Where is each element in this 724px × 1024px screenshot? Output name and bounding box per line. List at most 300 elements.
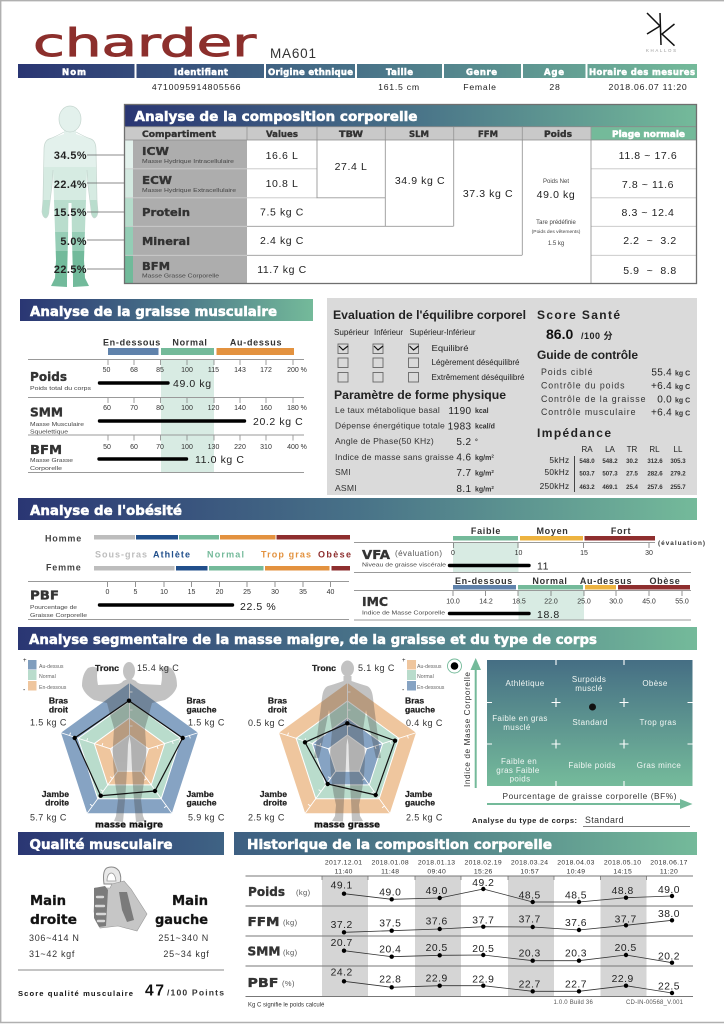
panel: muscle fat analysis: Au-dessus [230, 338, 282, 348]
logo: Khallos: KHALLOS [646, 48, 676, 53]
IMC chart: 25.0 [577, 598, 591, 606]
line chart: SMM: 20.7 [331, 938, 353, 949]
panel: muscle fat analysis: Normal [172, 338, 208, 348]
radar labels: lean mass: masse maigre [95, 820, 163, 830]
left hand: gauche [155, 913, 208, 928]
dates: 15:26 [474, 868, 493, 876]
physical parameters: Indice de masse sans graisse [335, 452, 454, 462]
legend: lean mass: - [23, 687, 26, 694]
panel: composition table: Poids [544, 130, 572, 140]
panel: muscle fat analysis: 220 [234, 444, 246, 451]
panel: muscle fat analysis: 70 [156, 444, 164, 451]
impedance table: 250kHz [540, 481, 570, 491]
footnotes: Kg C signifie le poids calculé [248, 1002, 325, 1008]
dates: 09:40 [427, 868, 446, 876]
radar labels: lean mass: Bras [186, 696, 206, 706]
control guide: kg C [675, 410, 690, 418]
panel: obesity analysis [18, 498, 705, 621]
right hand: Main [30, 894, 66, 909]
body composition figure: 15.5% [54, 207, 87, 219]
radar labels: lean mass: Tronc [95, 663, 119, 673]
row values: 11.8 ~ 17.6 [619, 150, 677, 162]
row: BFM: BFM [30, 442, 62, 457]
impedance table: 50kHz [544, 467, 570, 477]
PBF gender scale: Femme [46, 562, 82, 572]
physical parameters: kg/m [475, 486, 491, 494]
row values: 37.3 kg C [463, 188, 513, 200]
heading: history: Historique de la composition corporelle [247, 838, 552, 853]
radar labels: lean mass [30, 663, 225, 830]
VFA chart [354, 526, 705, 572]
label: horizontal axis: Pourcentage de graisse corporelle (BF%) [502, 791, 677, 801]
line chart: SMM: 20.4 [379, 945, 401, 956]
line chart: FFM: 37.5 [379, 919, 401, 930]
patient values: 28 [549, 82, 561, 92]
body type matrix: musclé [575, 684, 603, 693]
PBF chart: 35 [299, 589, 307, 596]
IMC chart: 22.0 [544, 598, 558, 606]
PBF gender scale [45, 534, 351, 572]
line chart: FFM: 37.2 [331, 920, 353, 931]
panel: muscle fat analysis: 50 [103, 444, 111, 451]
body type matrix: gras Faible [496, 766, 540, 775]
patient header bar [18, 64, 697, 78]
PBF chart: 30 [271, 589, 279, 596]
row labels: SMM [248, 944, 280, 958]
row: Poids [30, 369, 212, 392]
row labels: (%) [282, 979, 295, 988]
IMC chart: 55.0 [675, 598, 689, 606]
left hand: 251~340 N [158, 933, 209, 943]
dates: 10:49 [567, 868, 585, 876]
radar labels: lean mass: Jambe [42, 789, 69, 799]
panel: muscle fat analysis: 115 [208, 367, 219, 374]
legend: lean mass [23, 658, 67, 694]
dates [325, 860, 688, 876]
VFA chart: Fort [611, 526, 631, 536]
radar labels: fat mass: Bras [405, 696, 424, 706]
VFA chart: 0 [451, 550, 455, 557]
data polygon: lean mass [72, 698, 185, 798]
line chart: Poids: 49.0 [379, 888, 401, 899]
PBF chart: Graisse Corporelle [30, 613, 87, 619]
radar labels: lean mass: gauche [186, 798, 217, 808]
radar labels: lean mass: gauche [186, 704, 217, 714]
row values: 27.4 L [335, 161, 367, 173]
radar labels: fat mass: 0.5 kg C [248, 718, 285, 728]
heading: obesity: Analyse de l'obésité [30, 504, 182, 519]
VFA chart: 15 [580, 550, 588, 557]
body composition figure: 22.5% [54, 264, 87, 276]
body type result: Standard [585, 815, 624, 825]
panel: composition table [124, 104, 696, 284]
impedance table: 255.7 [670, 484, 686, 491]
body type matrix: Faible en [501, 757, 537, 766]
legend: fat mass: - [402, 687, 405, 694]
row labels: ECW [142, 174, 172, 187]
IMC chart: IMC [362, 594, 388, 609]
line chart: Poids: 49.0 [426, 886, 448, 897]
health score: /100 分 [581, 330, 613, 341]
physical parameters: Dépense énergétique totale [335, 420, 445, 430]
body type matrix [487, 660, 692, 786]
body type matrix: Trop gras [639, 718, 677, 727]
row labels [248, 884, 311, 990]
radar labels: lean mass: 15.4 kg C [137, 663, 179, 673]
physical parameters: 2 [491, 485, 494, 490]
physical parameters: ° [475, 438, 478, 446]
panel: muscle fat analysis: En-dessous [103, 338, 161, 348]
PBF gender scale: Normal [207, 550, 244, 560]
line chart: PBF: 22.9 [612, 974, 634, 985]
radar labels: lean mass: droit [49, 704, 68, 714]
line chart: SMM: 20.5 [426, 943, 448, 954]
row labels: Masse Hydrique Extracellulaire [142, 188, 236, 194]
radar labels: lean mass: Jambe [186, 789, 214, 799]
panel: muscle fat analysis: 80 [156, 405, 164, 412]
row: SMM: Masse Musculaire [30, 422, 84, 428]
IMC chart: Au-dessus [580, 576, 632, 586]
physical parameters: 5.2 [456, 437, 472, 448]
row values: 2.4 kg C [260, 235, 304, 247]
legend: lean mass: Au-dessus [39, 664, 64, 670]
health score: Score Santé [537, 308, 620, 322]
impedance table: 282.6 [647, 470, 663, 478]
body composition figure: 34.5% [54, 150, 87, 162]
IMC chart: 10.0 [446, 598, 460, 606]
row values: 7.8 ~ 11.6 [622, 179, 674, 191]
row: BFM [30, 442, 245, 472]
dates: 2018.03.24 [511, 860, 548, 866]
row labels: (kg) [283, 948, 298, 957]
radar labels: fat mass: droite [263, 798, 287, 808]
impedance table: 30.2 [626, 458, 639, 465]
physical parameters [334, 388, 506, 495]
impedance table: 279.2 [670, 470, 686, 478]
panel: segmental analysis [18, 627, 697, 830]
radar labels: lean mass: droite [45, 798, 69, 808]
row values: 8.3 ~ 12.4 [622, 207, 674, 219]
row labels: PBF [248, 975, 278, 990]
panel: composition history [234, 832, 697, 1008]
legend: fat mass: + [402, 658, 406, 664]
icon: target marker [448, 659, 462, 673]
arrow: horizontal axis [487, 799, 692, 809]
radar labels: fat mass: 2.5 kg C [248, 812, 285, 822]
patient values: 161.5 cm [378, 82, 420, 92]
impedance table: RL [649, 445, 660, 454]
panel: muscle fat analysis: 130 [208, 444, 219, 451]
PBF chart: 0 [106, 589, 110, 596]
dates: 11:20 [660, 868, 678, 876]
line chart: Poids [331, 878, 680, 904]
panel: muscle fat analysis: 200 % [287, 367, 307, 374]
right hand: droite [30, 913, 77, 928]
panel: muscle fat analysis: 85 [156, 367, 164, 374]
row: BFM: Corporelle [30, 466, 62, 472]
panel: muscle fat analysis: 140 [234, 405, 246, 412]
logo: Khallos [646, 13, 676, 53]
body type matrix: poids [510, 774, 530, 784]
body composition figure: 22.4% [54, 179, 87, 191]
physical parameters: Le taux métabolique basal [335, 405, 440, 415]
control guide: Contrôle de la graisse [541, 394, 646, 404]
physical parameters: kcal [475, 408, 489, 415]
panel: muscle fat analysis: 400 % [287, 444, 307, 451]
radar labels: fat mass: gauche [405, 798, 435, 808]
muscle quality score: Score qualité musculaire [18, 989, 133, 998]
body type matrix: Faible poids [568, 761, 616, 770]
line chart: SMM [331, 938, 680, 965]
right hand: 31~42 kgf [29, 949, 75, 959]
control guide: kg C [675, 370, 690, 378]
physical parameters: 1983 [448, 422, 472, 432]
control guide: 55.4 [651, 368, 672, 378]
physical parameters: 1190 [448, 406, 472, 417]
panel: composition table: Values [266, 130, 298, 140]
legend: fat mass: Normal [417, 674, 434, 680]
VFA chart: (évaluation) [395, 549, 442, 558]
marker: standard [589, 704, 596, 710]
health score [537, 308, 620, 342]
body composition figure: 5.0% [60, 236, 87, 248]
control guide: +6.4 [651, 408, 672, 418]
dates: 10:57 [520, 868, 539, 876]
VFA chart: 11 [537, 560, 549, 572]
PBF gender scale: Athlète [153, 550, 190, 560]
impedance table: 463.2 [579, 484, 595, 491]
VFA chart: VFA [362, 547, 390, 562]
patient header bar: Genre [466, 68, 497, 78]
data polygon: fat mass [303, 721, 397, 797]
physical parameters: 2 [491, 469, 494, 474]
row values: 16.6 L [266, 150, 298, 162]
VFA chart: Niveau de graisse viscérale [362, 562, 446, 568]
balance evaluation: Extrêmement déséquilibré [432, 373, 524, 382]
IMC chart: 18.5 [512, 598, 526, 606]
line chart: PBF: 24.2 [331, 968, 353, 979]
radar labels: fat mass: Jambe [405, 789, 432, 799]
radar labels: fat mass: Jambe [260, 789, 287, 799]
panel: muscle fat analysis: 310 [260, 444, 272, 451]
radar labels: lean mass: 5.9 kg C [188, 812, 225, 822]
patient header bar: Horaire des mesures [589, 68, 695, 78]
heading: segmental: Analyse segmentaire de la masse maigre, de la graisse et du type de corps [29, 633, 597, 648]
legend: fat mass [402, 658, 445, 694]
radar labels: fat mass: gauche [405, 704, 435, 714]
physical parameters: kcal/d [475, 424, 495, 430]
dates: 2018.01.08 [372, 860, 409, 866]
IMC chart [354, 576, 691, 621]
row: SMM: SMM [30, 404, 63, 420]
impedance table: 5kHz [549, 455, 570, 465]
row values [257, 150, 677, 277]
left hand: Main [172, 894, 208, 909]
PBF chart: Pourcentage de [30, 605, 77, 611]
footnotes: 1.0.0 Build 36 [554, 1000, 593, 1006]
line chart: FFM: 37.6 [426, 917, 448, 928]
patient values [152, 82, 688, 92]
body type result [472, 815, 690, 826]
legend: lean mass: Normal [39, 674, 56, 680]
body type matrix: Gras mince [637, 761, 681, 770]
impedance table: RA [581, 445, 593, 454]
arrow: vertical axis [470, 658, 481, 788]
balance evaluation: Inférieur [374, 328, 403, 337]
line chart: Poids: 48.5 [519, 890, 541, 901]
body composition figure [42, 106, 124, 287]
line chart: PBF: 22.9 [472, 975, 494, 986]
row labels: (kg) [296, 888, 311, 897]
PBF gender scale: Obèse [318, 550, 351, 560]
model: MA601: MA601 [270, 46, 317, 61]
muscle quality score: 47 [145, 982, 164, 1000]
line chart: Poids: 49.2 [472, 878, 494, 889]
body type matrix: Faible en gras [492, 714, 548, 723]
panel: muscle fat analysis: 60 [103, 405, 111, 412]
panel: composition table: SLM [409, 130, 429, 140]
panel: grey summary [327, 298, 697, 495]
patient values: 4710095914805566 [152, 82, 241, 92]
right hand [29, 894, 80, 959]
PBF chart: 40 [327, 589, 334, 596]
line chart: SMM: 20.3 [519, 949, 541, 960]
panel: muscle quality [18, 832, 224, 1000]
control guide: Poids ciblé [541, 367, 593, 377]
balance evaluation: Equilibré [432, 344, 468, 353]
IMC chart: Obèse [649, 576, 681, 586]
impedance table: LL [674, 445, 683, 454]
legend: fat mass: En-dessous [417, 685, 445, 691]
PBF chart: PBF [30, 588, 59, 602]
balance evaluation: Evaluation de l'équilibre corporel [333, 308, 526, 322]
patient header bar: Age [544, 68, 564, 78]
radar labels: fat mass: masse grasse [314, 820, 380, 830]
row values: Tare prédéfinie [536, 220, 577, 226]
row values: (Poids des vêtements) [532, 229, 581, 235]
impedance table: 469.1 [602, 484, 618, 491]
line chart: FFM: 37.6 [565, 918, 587, 929]
balance evaluation [333, 308, 526, 382]
control guide: kg C [675, 398, 690, 404]
footnotes [248, 1000, 684, 1008]
heading: muscle quality: Qualité musculaire [30, 838, 173, 853]
panel: muscle fat analysis: 100 [181, 444, 193, 451]
body type matrix: Surpoids [572, 675, 606, 684]
PBF chart: 20 [216, 589, 223, 596]
radar: lean mass [61, 662, 199, 822]
body type matrix: Athlétique [505, 679, 545, 688]
row values: 2.2 ~ 3.2 [623, 235, 677, 247]
PBF chart [28, 582, 349, 620]
PBF gender scale: Trop gras [261, 550, 311, 560]
dates: 14:15 [613, 868, 632, 876]
figure: standing body [314, 660, 381, 822]
panel: composition table: FFM [478, 130, 498, 140]
IMC chart: 14.2 [479, 598, 493, 606]
patient values: Female [463, 82, 497, 92]
row labels: (kg) [283, 918, 298, 927]
row labels: BFM [142, 260, 170, 273]
control guide: Contrôle musculaire [541, 407, 636, 417]
physical parameters: ASMI [335, 483, 357, 493]
impedance table: LA [605, 445, 616, 454]
VFA chart: Moyen [536, 526, 569, 536]
panel: composition table: TBW [339, 130, 364, 140]
dates: 11:40 [335, 868, 353, 876]
panel: composition table: Plage normale [612, 130, 685, 140]
radar labels: fat mass: 0.4 kg C [406, 718, 443, 728]
body type matrix: musclé [503, 723, 531, 732]
muscle quality score: /100 Points [167, 988, 224, 998]
row labels [142, 145, 236, 280]
panel: muscle fat analysis: 143 [234, 367, 246, 374]
dates: 2018.06.17 [650, 860, 688, 866]
patient values: 2018.06.07 11:20 [608, 82, 688, 92]
row values: Poids Net [543, 179, 569, 185]
line chart: PBF: 22.9 [426, 974, 448, 985]
row labels: Masse Grasse Corporelle [142, 274, 219, 280]
label: vertical axis: Indice de Masse Corporelle [462, 672, 472, 787]
physical parameters: Angle de Phase(50 KHz) [335, 436, 434, 446]
impedance table: 503.7 [579, 470, 595, 478]
radar labels: lean mass: 1.5 kg C [30, 718, 67, 728]
line chart: FFM: 37.7 [472, 915, 494, 926]
row: SMM: 20.2 kg C [253, 416, 303, 428]
radar labels: fat mass: Tronc [312, 663, 336, 673]
row: Poids: Poids [30, 369, 67, 384]
line chart: FFM: 38.0 [658, 909, 680, 920]
PBF chart: 15 [188, 589, 195, 596]
left hand [155, 894, 210, 959]
row labels: Mineral [142, 235, 190, 248]
patient header bar: Origine ethnique [268, 68, 353, 78]
body type result: Analyse du type de corps: [472, 816, 577, 825]
dates: 2018.02.19 [465, 860, 502, 866]
patient header bar: Nom [62, 68, 86, 78]
line chart: SMM: 20.5 [615, 943, 637, 954]
row: Poids: Poids total du corps [30, 386, 91, 392]
impedance table: 548.0 [579, 458, 595, 465]
balance evaluation: Supérieur-Inférieur [410, 328, 476, 337]
body type matrix: Standard [572, 718, 608, 727]
physical parameters: 2 [491, 454, 494, 458]
impedance table: 548.2 [602, 458, 618, 465]
dates: 2018.05.10 [604, 860, 641, 866]
line chart: PBF: 22.7 [519, 979, 541, 990]
row values: 11.7 kg C [257, 264, 307, 276]
VFA chart: Faible [471, 526, 501, 536]
health score: 86.0 [546, 326, 573, 342]
line chart: Poids: 49.1 [331, 881, 353, 892]
radar labels: lean mass: 1.5 kg C [188, 718, 225, 728]
line chart: Poids: 49.0 [658, 885, 680, 896]
radar: fat mass [279, 660, 417, 822]
impedance table: Impédance [537, 426, 611, 440]
row values: 1.5 kg [548, 241, 564, 247]
impedance table: 27.5 [626, 470, 639, 478]
PBF chart: 10 [160, 589, 168, 596]
panel: muscle fat analysis: 180 % [287, 405, 307, 412]
PBF chart: 25 [243, 589, 251, 596]
panel: muscle fat analysis: 160 [260, 405, 272, 412]
line chart: PBF: 22.7 [565, 979, 587, 990]
physical parameters: SMI [335, 467, 351, 477]
impedance table [537, 426, 686, 492]
panel: muscle fat analysis: 70 [130, 405, 138, 412]
row labels: Poids [248, 884, 285, 899]
physical parameters: 4.6 [456, 452, 472, 464]
